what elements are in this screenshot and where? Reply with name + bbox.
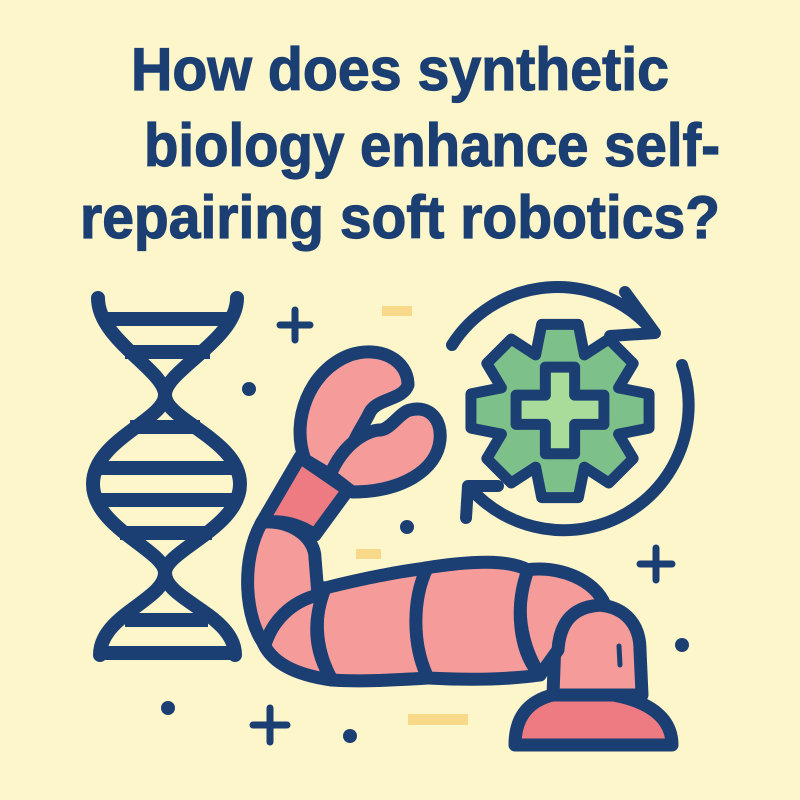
- segment 3: [262, 587, 332, 680]
- icon: gear with plus: [471, 324, 649, 498]
- icon: DNA helix: [93, 298, 240, 655]
- claw lower jaw: [330, 409, 440, 492]
- elbow segment: [520, 569, 605, 675]
- dark pink segment: [262, 457, 348, 535]
- segment 2: [317, 568, 428, 681]
- icon: circular arrows: [452, 287, 689, 530]
- vertical joint: [553, 605, 642, 695]
- title: How does synthetic: [131, 36, 669, 103]
- yellow dashes: [356, 306, 468, 725]
- arm detail line: [619, 646, 620, 665]
- title: repairing soft robotics?: [80, 184, 720, 251]
- robotic arm: [248, 352, 672, 745]
- title: biology enhance self-: [144, 112, 720, 179]
- long segment: [414, 562, 540, 679]
- decorative plus signs and dots: [161, 310, 689, 743]
- arm base: [515, 692, 672, 745]
- title: [80, 36, 720, 251]
- curved lower segment: [248, 522, 318, 645]
- claw upper jaw: [300, 352, 408, 475]
